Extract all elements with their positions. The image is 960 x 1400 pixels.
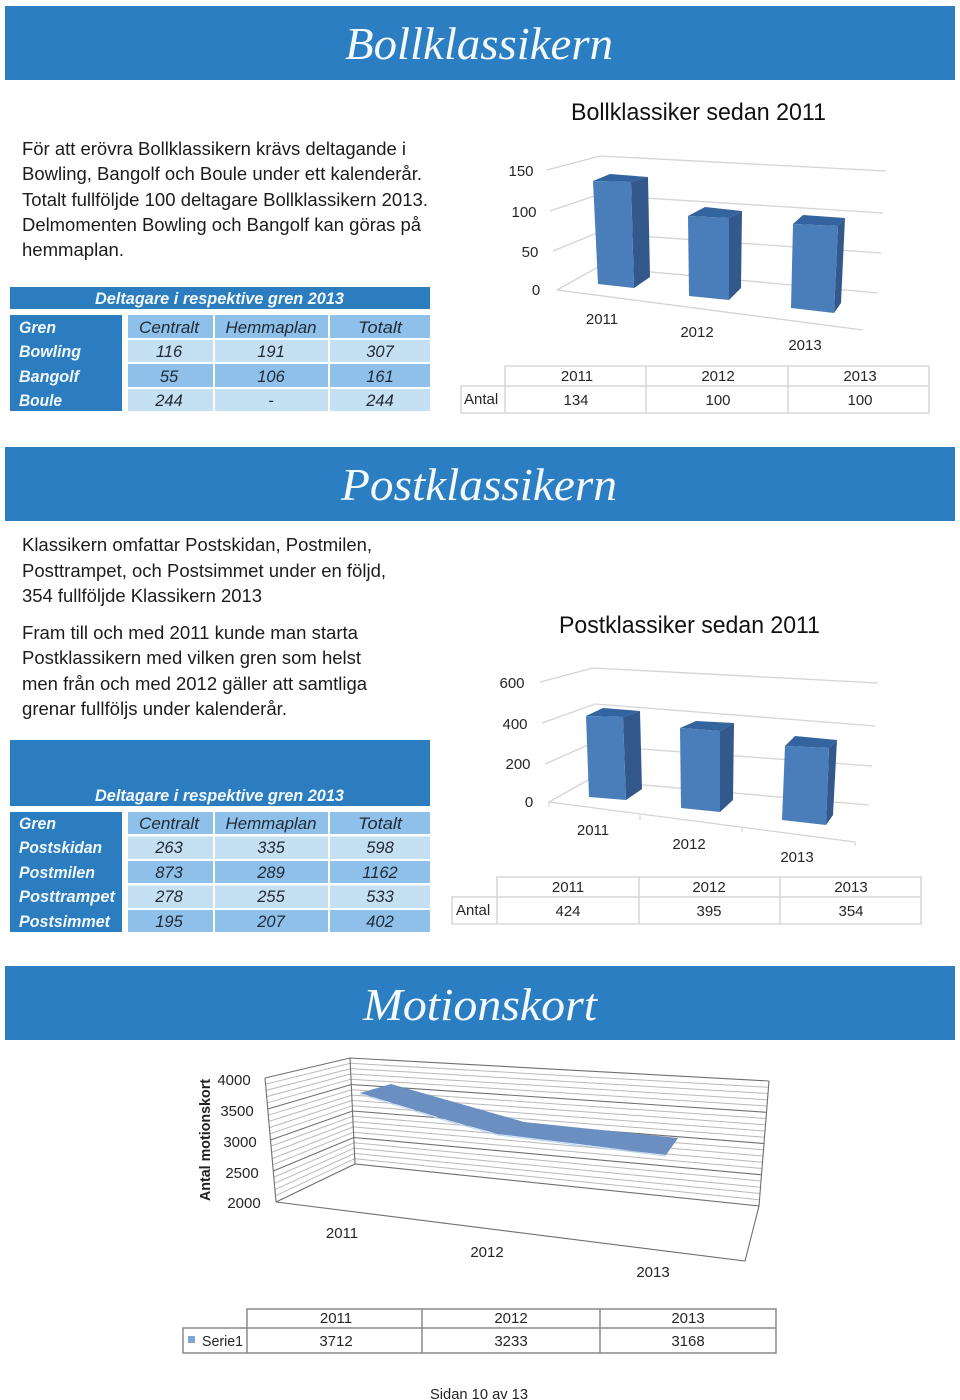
chart data table: 2013 xyxy=(843,368,877,385)
table: Deltagare i respektive gren 2013 (Postklassikern): Totalt xyxy=(358,815,404,833)
table: Deltagare i respektive gren 2013 (Postklassikern): 533 xyxy=(366,888,395,906)
banner: Motionskort: Motionskort xyxy=(362,979,598,1030)
table: Deltagare i respektive gren 2013 (Postklassikern): 195 xyxy=(155,913,184,931)
text block: Postklassikern intro: Posttrampet, och Postsimmet under en följd, xyxy=(22,561,386,581)
chart data table: 134 xyxy=(563,392,589,409)
text block: Postklassikern rules: Fram till och med 2011 kunde man starta xyxy=(22,623,359,643)
chart data table xyxy=(461,366,929,413)
x axis labels xyxy=(326,1225,670,1281)
text block: Postklassikern rules xyxy=(22,623,368,719)
text block: Postklassikern rules: men från och med 2012 gäller att samtliga xyxy=(22,674,368,694)
table: Deltagare i respektive gren 2013 (Postklassikern): 278 xyxy=(154,888,184,906)
chart data table: Antal xyxy=(464,391,498,408)
chart data table: 3712 xyxy=(319,1333,353,1350)
y axis labels: 2000 xyxy=(227,1195,261,1212)
text block: Postklassikern intro: 354 fullföljde Klassikern 2013 xyxy=(22,586,262,606)
table: Deltagare i respektive gren 2013 (Postklassikern) xyxy=(10,740,430,932)
text block: Postklassikern intro xyxy=(22,535,386,606)
x axis labels: 2012 xyxy=(680,324,714,341)
table: Deltagare i respektive gren 2013 (Postklassikern): 255 xyxy=(256,888,286,906)
table: Deltagare i respektive gren 2013 (Bollklassikern): 55 xyxy=(160,368,179,386)
bar 2012 xyxy=(680,721,734,812)
table: Deltagare i respektive gren 2013 (Postklassikern): 1162 xyxy=(362,864,398,882)
table: Deltagare i respektive gren 2013 (Bollklassikern): Totalt xyxy=(358,319,404,337)
table: Deltagare i respektive gren 2013 (Bollklassikern): Deltagare i respektive gren 2013 xyxy=(95,290,344,308)
chart data table: 3233 xyxy=(494,1333,528,1350)
y axis labels: 600 xyxy=(499,675,525,692)
x axis labels xyxy=(577,822,814,866)
bar 2013 xyxy=(782,736,837,825)
bar 2012 xyxy=(688,207,742,300)
chart: Postklassiker sedan 2011 xyxy=(452,612,921,924)
table: Deltagare i respektive gren 2013 (Bollklassikern): 161 xyxy=(366,368,394,386)
table: Deltagare i respektive gren 2013 (Bollklassikern): Gren xyxy=(19,319,56,337)
table: Deltagare i respektive gren 2013 (Postklassikern): Posttrampet xyxy=(19,888,116,906)
x axis labels: 2013 xyxy=(780,849,814,866)
banner: Postklassikern: Postklassikern xyxy=(340,459,617,510)
table: Deltagare i respektive gren 2013 (Bollklassikern): Bangolf xyxy=(19,368,80,386)
table: Deltagare i respektive gren 2013 (Bollklassikern): 106 xyxy=(257,368,286,386)
y axis labels xyxy=(499,675,533,811)
y axis labels xyxy=(217,1072,261,1212)
table: Deltagare i respektive gren 2013 (Postklassikern): 289 xyxy=(256,864,285,882)
y axis labels: 100 xyxy=(511,204,537,221)
table: Deltagare i respektive gren 2013 (Postklassikern): Postmilen xyxy=(19,864,95,882)
text block: Postklassikern intro: Klassikern omfattar Postskidan, Postmilen, xyxy=(22,535,372,555)
chart data table: 354 xyxy=(838,903,864,920)
table: Deltagare i respektive gren 2013 (Postklassikern): 873 xyxy=(155,864,184,882)
chart data table: 2011 xyxy=(561,368,593,385)
y axis labels: 3500 xyxy=(220,1103,254,1120)
x axis labels: 2012 xyxy=(470,1244,504,1261)
y axis title: Antal motionskort xyxy=(197,1079,214,1201)
bar 2011 xyxy=(586,708,642,800)
table: Deltagare i respektive gren 2013 (Bollklassikern): Hemmaplan xyxy=(226,319,316,337)
x axis labels: 2011 xyxy=(586,311,618,328)
chart data table: 100 xyxy=(847,392,873,409)
x axis labels: 2011 xyxy=(326,1225,358,1242)
table: Deltagare i respektive gren 2013 (Bollklassikern) xyxy=(10,287,430,411)
text block: Bollklassikern intro: Totalt fullföljde 100 deltagare Bollklassikern 2013. xyxy=(22,190,428,210)
table: Deltagare i respektive gren 2013 (Postklassikern): Centralt xyxy=(139,815,200,833)
table: Deltagare i respektive gren 2013 (Bollklassikern): Bowling xyxy=(19,343,81,361)
area ribbon xyxy=(360,1084,678,1156)
chart data table: 2013 xyxy=(834,879,868,896)
table: Deltagare i respektive gren 2013 (Bollklassikern): - xyxy=(268,392,274,410)
banner: Bollklassikern xyxy=(5,6,955,80)
table: Deltagare i respektive gren 2013 (Bollklassikern): 116 xyxy=(156,343,183,361)
chart data table xyxy=(452,877,921,924)
y axis labels: 200 xyxy=(505,756,531,773)
x axis labels xyxy=(586,311,822,354)
chart data table: 3168 xyxy=(671,1333,705,1350)
table: Deltagare i respektive gren 2013 (Bollklassikern): 307 xyxy=(366,343,395,361)
x axis labels: 2011 xyxy=(577,822,609,839)
chart data table xyxy=(183,1309,776,1353)
bar 2013 xyxy=(791,215,845,313)
table: Deltagare i respektive gren 2013 (Postklassikern): Deltagare i respektive gren 2013 xyxy=(95,787,344,805)
y axis labels: 4000 xyxy=(217,1072,251,1089)
y axis labels: 400 xyxy=(502,716,528,733)
x axis labels: 2013 xyxy=(788,337,822,354)
table: Deltagare i respektive gren 2013 (Bollklassikern): Boule xyxy=(19,392,62,410)
table: Deltagare i respektive gren 2013 (Postklassikern): Gren xyxy=(19,815,56,833)
chart title: Postklassiker sedan 2011 xyxy=(559,612,820,639)
3D wall gridlines xyxy=(265,1058,769,1261)
chart data table: 2011 xyxy=(552,879,584,896)
table: Deltagare i respektive gren 2013 (Postklassikern): 402 xyxy=(366,913,394,931)
text block: Postklassikern rules: Postklassikern med vilken gren som helst xyxy=(22,648,361,668)
chart: Antal motionskort xyxy=(183,1058,776,1353)
table: Deltagare i respektive gren 2013 (Postklassikern): Hemmaplan xyxy=(226,815,316,833)
table: Deltagare i respektive gren 2013 (Postklassikern): 263 xyxy=(154,839,184,857)
x axis labels: 2013 xyxy=(636,1264,670,1281)
x axis labels: 2012 xyxy=(672,836,706,853)
banner: Postklassikern xyxy=(5,447,955,521)
y axis labels: 3000 xyxy=(223,1134,257,1151)
chart data table: Antal xyxy=(456,902,490,919)
chart: Bollklassiker sedan 2011 xyxy=(461,99,929,413)
text block: Postklassikern rules: grenar fullföljs under kalenderår. xyxy=(22,699,287,719)
text block: Bollklassikern intro: Bowling, Bangolf och Boule under ett kalenderår. xyxy=(22,164,422,184)
chart data table: 100 xyxy=(705,392,731,409)
y axis labels: 150 xyxy=(508,163,534,180)
y axis labels: 0 xyxy=(532,282,540,299)
chart data table: 2012 xyxy=(701,368,735,385)
text block: Bollklassikern intro: För att erövra Bollklassikern krävs deltagande i xyxy=(22,139,406,159)
chart data table: 395 xyxy=(696,903,722,920)
bar 2011 xyxy=(593,174,650,288)
banner: Bollklassikern: Bollklassikern xyxy=(345,18,613,69)
chart data table: Serie1 xyxy=(202,1333,243,1350)
text block: Bollklassikern intro xyxy=(22,139,428,260)
table: Deltagare i respektive gren 2013 (Bollklassikern): 191 xyxy=(257,343,285,361)
y axis labels: 50 xyxy=(522,244,538,261)
table: Deltagare i respektive gren 2013 (Bollklassikern): Centralt xyxy=(139,319,200,337)
chart gridlines and floor xyxy=(540,668,878,846)
y axis labels: 0 xyxy=(525,794,533,811)
table: Deltagare i respektive gren 2013 (Postklassikern): Postskidan xyxy=(19,839,102,857)
table: Deltagare i respektive gren 2013 (Postklassikern): 207 xyxy=(256,913,286,931)
chart gridlines and floor xyxy=(547,156,886,330)
table: Deltagare i respektive gren 2013 (Postklassikern): 598 xyxy=(366,839,395,857)
chart data table: 2013 xyxy=(671,1310,705,1327)
text block: Bollklassikern intro: hemmaplan. xyxy=(22,240,124,260)
chart title: Bollklassiker sedan 2011 xyxy=(571,99,826,126)
chart data table: 2012 xyxy=(692,879,726,896)
chart data table: 2012 xyxy=(494,1310,528,1327)
y axis labels: 2500 xyxy=(225,1165,259,1182)
text block: Bollklassikern intro: Delmomenten Bowling och Bangolf kan göras på xyxy=(22,215,422,235)
chart data table: 424 xyxy=(555,903,581,920)
banner: Motionskort xyxy=(5,966,955,1040)
table: Deltagare i respektive gren 2013 (Postklassikern): Postsimmet xyxy=(19,913,111,931)
table: Deltagare i respektive gren 2013 (Bollklassikern): 244 xyxy=(365,392,394,410)
y axis labels xyxy=(508,163,540,299)
table: Deltagare i respektive gren 2013 (Postklassikern): 335 xyxy=(257,839,286,857)
table: Deltagare i respektive gren 2013 (Bollklassikern): 244 xyxy=(154,392,183,410)
chart data table: 2011 xyxy=(320,1310,352,1327)
